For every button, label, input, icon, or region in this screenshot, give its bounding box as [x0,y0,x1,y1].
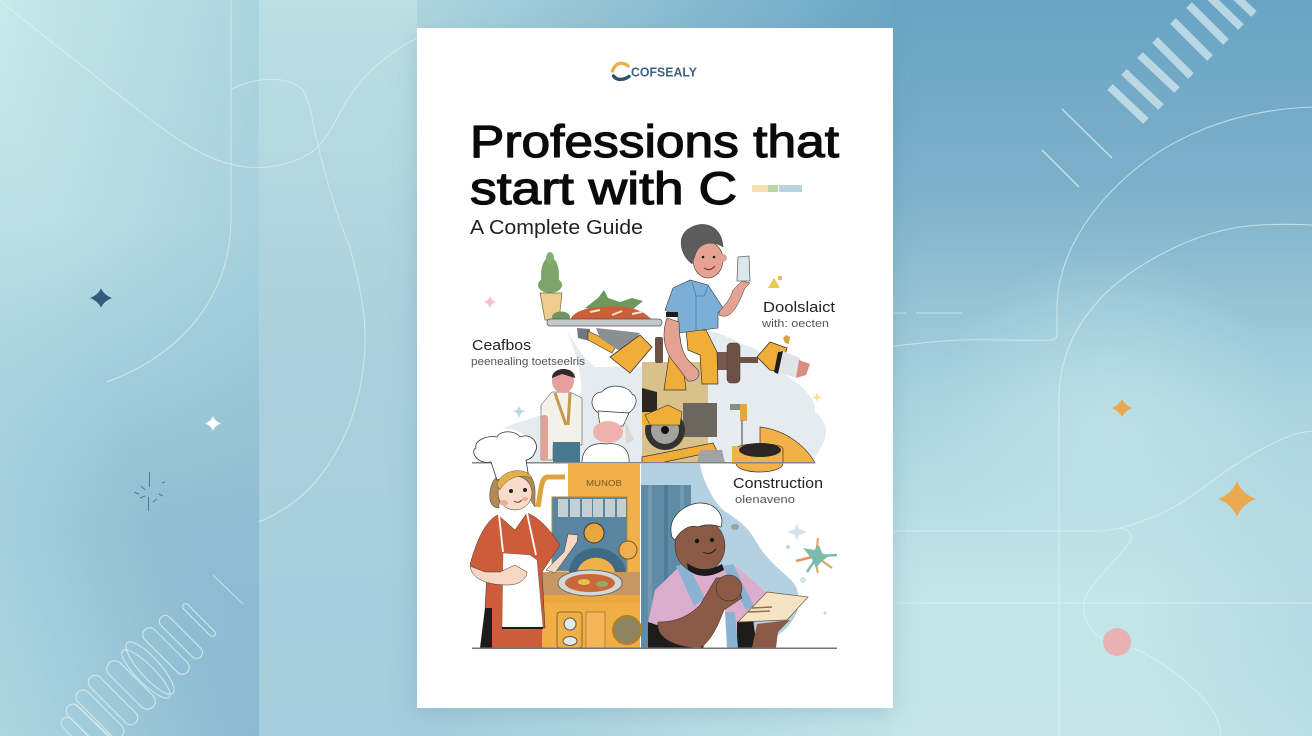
illustration: blue curtain [641,485,691,648]
illustration: tray with food [547,290,662,326]
illustration: cook woman [470,432,578,648]
illustration: oven [538,463,641,648]
title: Professions that [470,116,840,167]
logo: COFSEALY [631,64,697,80]
illustration: worker with phone [664,224,750,390]
label: Construction: Construction [733,475,823,492]
page shadow [415,34,895,714]
illustration: plant and pot [538,252,562,320]
label: Doolslaict [761,299,836,330]
illustration: oven: MUNOB [586,479,622,488]
illustration: bowl and device [730,404,815,472]
label: Ceafbos [471,337,586,368]
illustration: waiter figure [541,369,582,463]
divider line upper scene [472,462,815,464]
label: Construction: olenaveno [735,494,795,506]
subtitle: A Complete Guide [470,217,643,239]
logo [612,63,697,80]
blue wavy background behind baker [641,464,799,648]
striped decoration top right [1110,0,1254,121]
poster page [417,28,893,708]
coil decoration bottom left [59,602,217,736]
label: Ceafbos: Ceafbos [472,337,531,354]
grey background blob upper scene [503,330,826,463]
baseline [472,648,837,649]
illustration: machine body [577,328,810,463]
icon: colourful star [731,523,837,614]
background curved lines: right [893,107,1312,736]
label: Construction [733,475,823,506]
illustration: small chef [582,386,636,463]
small decorations on page [484,276,822,418]
title line two: start with C [470,163,737,214]
illustration: baker with tablet [648,503,808,648]
label: Ceafbos: peenealing toetseelris [471,356,586,368]
label: Doolslaict: with: oecten [761,318,829,330]
background curved lines: left [0,0,417,604]
label: Doolslaict: Doolslaict [763,299,836,316]
decorative stars [90,288,1256,656]
colour bars [752,185,802,192]
